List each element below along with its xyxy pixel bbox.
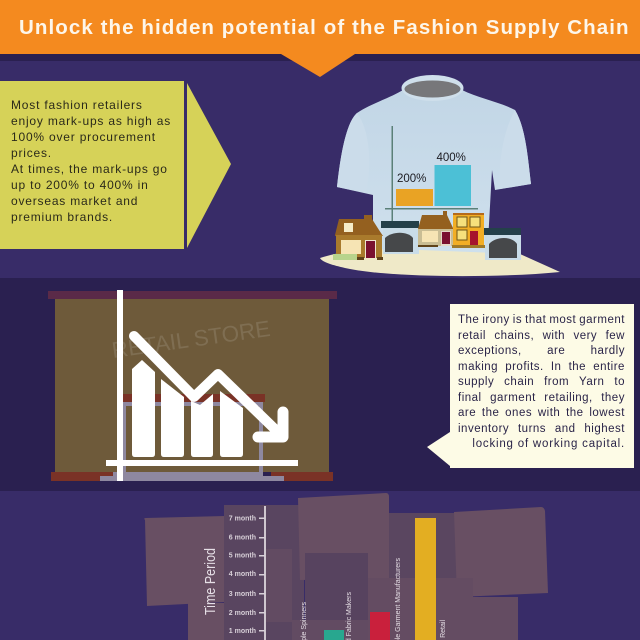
x axis labels bbox=[301, 558, 447, 640]
text block: irony: lowest bbox=[589, 407, 625, 419]
text block: irony: from bbox=[544, 376, 569, 388]
ground bbox=[320, 249, 560, 276]
bar: retail bbox=[415, 518, 436, 640]
header shadow band bbox=[0, 54, 640, 61]
text block: irony: very bbox=[573, 330, 597, 342]
yellow callout box bbox=[0, 81, 184, 249]
text block: irony: hardly bbox=[591, 345, 625, 357]
falling trend arrow bbox=[134, 336, 283, 437]
text block: irony: are bbox=[458, 407, 476, 419]
text block: irony: are bbox=[547, 345, 565, 357]
bar: 200% bbox=[396, 173, 433, 206]
text block: irony: the bbox=[569, 360, 586, 372]
text block: irony: to bbox=[614, 376, 625, 388]
store sign: RETAIL STORE bbox=[110, 316, 272, 363]
text block: irony: In bbox=[551, 360, 561, 372]
text block: irony: they bbox=[601, 392, 625, 404]
text block: markups: enjoy mark-ups as high as bbox=[11, 114, 171, 128]
text block: irony: final bbox=[458, 392, 482, 404]
text block: irony: chains, bbox=[494, 330, 534, 342]
chart axes bbox=[385, 126, 478, 260]
icon: house 1 bbox=[335, 215, 383, 260]
text block: irony: chain bbox=[504, 376, 534, 388]
text block: irony: with bbox=[538, 407, 560, 419]
y axis labels: 4 month bbox=[229, 571, 256, 578]
text panel arrow bbox=[427, 432, 450, 466]
x axis labels: ple Spinners bbox=[301, 602, 308, 640]
illustration: t-shirt with bars and houses bbox=[320, 75, 560, 276]
text block: irony: turns bbox=[518, 422, 546, 434]
text block: irony: making bbox=[458, 360, 498, 372]
store roof bbox=[48, 291, 337, 299]
header banner bbox=[0, 0, 640, 77]
y axis labels: 7 month bbox=[229, 516, 256, 522]
bar: 400% bbox=[434, 152, 471, 206]
text block: irony: entire bbox=[593, 360, 625, 372]
icon: garage 1 bbox=[381, 221, 419, 254]
text block: irony: that bbox=[525, 314, 546, 326]
text block: irony: exceptions, bbox=[458, 345, 522, 357]
y axis labels: 5 month bbox=[229, 552, 256, 560]
text block: irony: supply bbox=[458, 376, 494, 388]
chart background blocks bbox=[144, 493, 548, 640]
store window frame bbox=[123, 394, 265, 472]
text block: markups: prices. bbox=[11, 146, 52, 160]
text block: markups bbox=[11, 98, 171, 224]
chart axes bbox=[106, 290, 298, 481]
text block: markups: Most fashion retailers bbox=[11, 98, 143, 112]
text block: markups: up to 200% to 400% in bbox=[11, 178, 149, 192]
y axis labels: 2 month bbox=[229, 610, 256, 617]
title: Unlock the hidden potential of the Fashion Supply Chain bbox=[19, 16, 630, 39]
y axis labels: 6 month bbox=[229, 534, 256, 542]
text block: irony: garment bbox=[579, 314, 625, 326]
text block: irony: the bbox=[566, 407, 584, 419]
text block: irony: most bbox=[549, 314, 576, 326]
store base bbox=[51, 472, 333, 481]
text block: irony: ones bbox=[505, 407, 532, 419]
y axis title: Time Period bbox=[203, 548, 219, 615]
store wall bbox=[55, 299, 329, 472]
chart bars bbox=[132, 360, 243, 457]
panel: chart section background bbox=[0, 492, 640, 640]
text block: irony: the bbox=[482, 407, 499, 419]
bar chart: time period bbox=[203, 506, 447, 640]
text block: irony: highest bbox=[584, 422, 625, 434]
lawn bbox=[333, 254, 357, 260]
text block: irony: is bbox=[513, 314, 522, 326]
y axis labels: 3 month bbox=[229, 591, 256, 598]
y axis bbox=[264, 506, 266, 640]
text block: irony: profits. bbox=[505, 360, 544, 372]
bar: 200%: 200% bbox=[397, 173, 426, 185]
text block: irony: few bbox=[606, 330, 625, 342]
icon: t-shirt bbox=[337, 75, 531, 260]
text block: irony: garment bbox=[490, 392, 536, 404]
icon: house 3 bbox=[452, 213, 485, 248]
text block: irony: inventory bbox=[458, 422, 509, 434]
text block: markups: At times, the mark-ups go bbox=[11, 162, 168, 176]
illustration: retail store with falling chart bbox=[48, 290, 337, 481]
text block: irony: irony bbox=[482, 314, 510, 326]
text block: irony: and bbox=[555, 422, 576, 434]
icon: house 2 bbox=[418, 211, 454, 247]
icon: garage 2 bbox=[484, 228, 521, 260]
y axis ticks bbox=[259, 518, 265, 632]
text block: irony: retail bbox=[458, 330, 486, 342]
panel: retail section background bbox=[0, 278, 640, 491]
bar: 400%: 400% bbox=[436, 152, 466, 164]
text block: irony: Yarn bbox=[579, 376, 604, 388]
y axis labels bbox=[229, 516, 256, 635]
text block: irony: The bbox=[458, 314, 479, 326]
text panel bbox=[450, 304, 634, 468]
text block: irony: locking of working capital. bbox=[472, 438, 625, 450]
text block: markups: overseas market and bbox=[11, 194, 138, 208]
bar: fabric makers bbox=[324, 630, 344, 640]
text block: markups: 100% over procurement bbox=[11, 130, 156, 144]
panel: markup section background bbox=[0, 54, 640, 278]
yellow callout arrow bbox=[187, 83, 231, 248]
text block: irony: retailing, bbox=[544, 392, 593, 404]
text block: irony bbox=[458, 314, 625, 450]
bar: garment manufacturers bbox=[370, 612, 390, 640]
text block: markups: premium brands. bbox=[11, 210, 113, 224]
text block: irony: with bbox=[543, 330, 565, 342]
y axis labels: 1 month bbox=[229, 628, 256, 635]
